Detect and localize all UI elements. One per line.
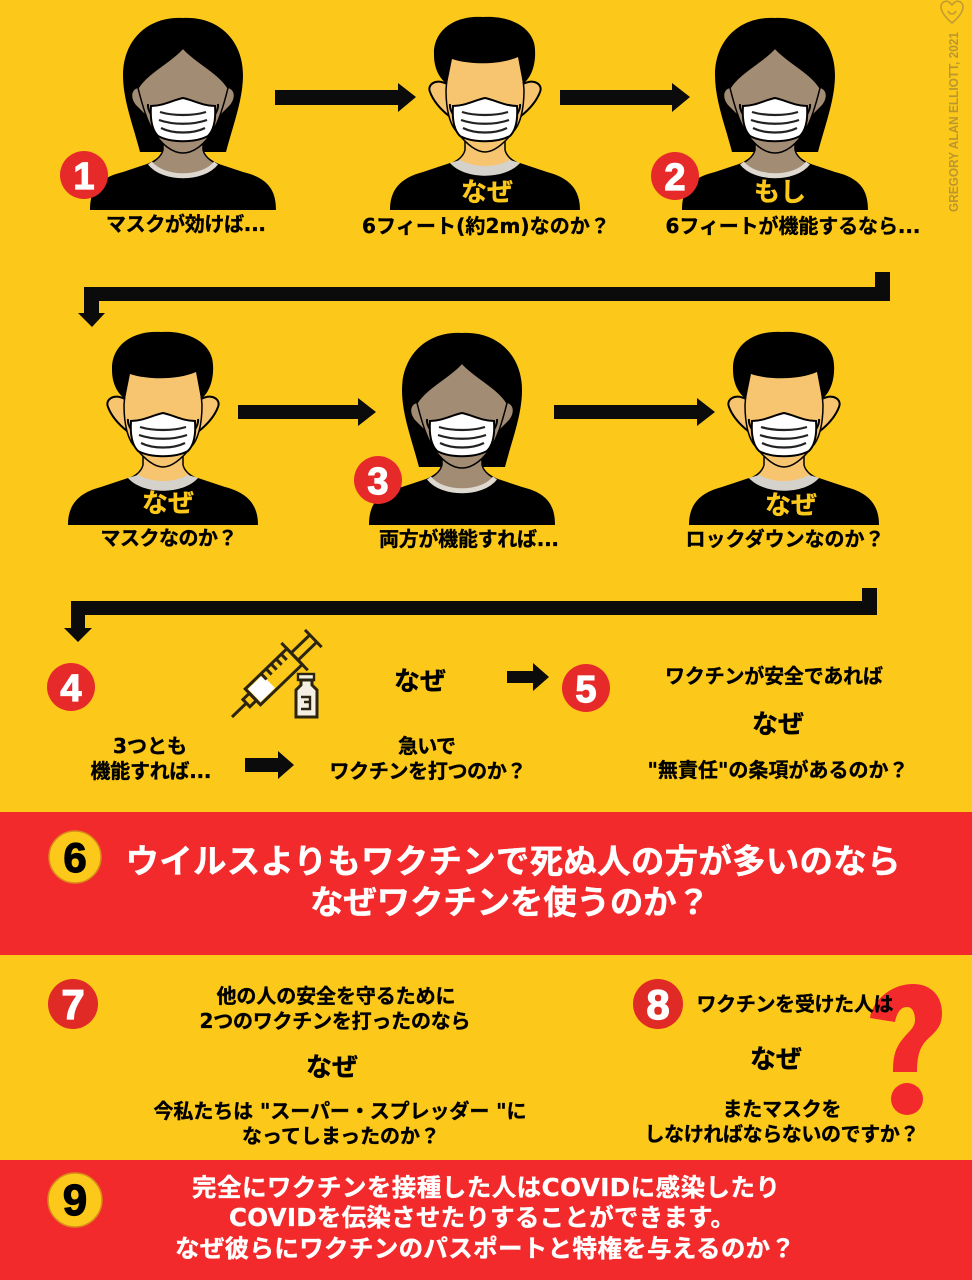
figure 2: man with why xyxy=(390,17,580,210)
why label section 7: なぜ xyxy=(306,1053,358,1083)
text: super spreader: 今私たちは "スーパー・スプレッダー "に xyxy=(154,1099,526,1123)
badge 7 xyxy=(48,979,98,1029)
caption 1: マスクが効けば... xyxy=(106,212,266,236)
badge 1 xyxy=(60,151,108,199)
text: masks again xyxy=(644,1097,920,1146)
why label: なぜ xyxy=(765,491,817,521)
badge 6 xyxy=(49,831,101,883)
text: super spreader: なってしまったのか？ xyxy=(242,1124,440,1148)
text: two vaccines xyxy=(200,984,470,1033)
caption 3: 6フィートが機能するなら... xyxy=(666,214,920,238)
figure 4: man with why xyxy=(68,332,258,525)
banner 6 heading xyxy=(126,842,900,922)
text: masks again: またマスクを xyxy=(722,1097,842,1121)
text: no liability: "無責任"の条項があるのか？ xyxy=(648,758,908,782)
banner 9 text: なぜ彼らにワクチンのパスポートと特権を与えるのか？ xyxy=(175,1234,795,1263)
panel: red banner 9 xyxy=(0,1160,972,1280)
connector arrow 1 xyxy=(78,272,890,327)
badge 9: 9 xyxy=(63,1176,87,1225)
text: if all three work: 3つとも xyxy=(113,734,187,758)
text: if all three work xyxy=(90,734,212,783)
text: two vaccines: 2つのワクチンを打ったのなら xyxy=(200,1009,470,1033)
why label section 4: なぜ xyxy=(394,667,446,697)
badge 8: 8 xyxy=(646,981,670,1028)
text: rush vaccine: ワクチンを打つのか？ xyxy=(330,759,526,783)
banner 6 heading: なぜワクチンを使うのか？ xyxy=(310,883,710,922)
text: rush vaccine: 急いで xyxy=(398,734,456,758)
badge 9 xyxy=(48,1173,102,1227)
badge 2 xyxy=(651,152,699,200)
figure 1: woman with badge 1 xyxy=(60,18,276,210)
badge 8 xyxy=(633,979,683,1029)
figure 6: man with why xyxy=(689,332,879,525)
connector arrow 2 xyxy=(64,588,877,642)
why label: なぜ xyxy=(142,489,194,519)
figure 3: woman with badge 2 xyxy=(651,18,868,210)
if label: もし xyxy=(754,178,806,208)
badge 3: 3 xyxy=(367,461,389,503)
badge 4 xyxy=(47,663,95,711)
caption 5: 両方が機能すれば... xyxy=(379,527,559,551)
badge 2: 2 xyxy=(664,157,686,199)
caption 6: ロックダウンなのか？ xyxy=(686,527,884,551)
credit: artist signature: GREGORY ALAN ELLIOTT, 2021 xyxy=(946,32,961,212)
badge 5: 5 xyxy=(575,669,597,711)
arrow 6 xyxy=(245,751,294,779)
badge 3 xyxy=(354,456,402,504)
why label: なぜ xyxy=(461,178,513,208)
banner 9 text: 完全にワクチンを接種した人はCOVIDに感染したり xyxy=(192,1173,780,1202)
badge 1: 1 xyxy=(73,156,95,198)
banner 9 text xyxy=(175,1173,795,1263)
icon: red question mark xyxy=(870,984,942,1115)
badge 6: 6 xyxy=(63,834,87,881)
badge 5 xyxy=(562,664,610,712)
text: rush vaccine xyxy=(330,734,526,783)
icon: syringe xyxy=(219,625,326,731)
text: vaccinated people: ワクチンを受けた人は xyxy=(696,992,894,1016)
text: vaccine safe: ワクチンが安全であれば xyxy=(665,664,883,688)
credit: artist signature xyxy=(941,1,963,212)
figure 5: woman with badge 3 xyxy=(354,333,555,525)
why label section 8: なぜ xyxy=(750,1045,802,1075)
banner 9 text: COVIDを伝染させたりすることができます。 xyxy=(229,1203,735,1232)
arrow 1 xyxy=(275,83,416,112)
arrow 3 xyxy=(238,398,376,426)
arrow 4 xyxy=(554,398,715,426)
arrow 2 xyxy=(560,83,690,112)
text: if all three work: 機能すれば... xyxy=(90,759,212,783)
text: super spreader xyxy=(154,1099,526,1148)
panel: red banner 6 xyxy=(0,812,972,955)
banner 6 heading: ウイルスよりもワクチンで死ぬ人の方が多いのなら xyxy=(126,842,900,881)
icon: vial xyxy=(296,674,317,717)
caption 4: マスクなのか？ xyxy=(100,526,238,550)
text: two vaccines: 他の人の安全を守るために xyxy=(216,984,456,1008)
badge 7: 7 xyxy=(61,981,85,1028)
caption 2: 6フィート(約2m)なのか？ xyxy=(362,214,610,238)
why label section 5: なぜ xyxy=(752,710,804,740)
text: masks again: しなければならないのですか？ xyxy=(644,1122,920,1146)
badge 4: 4 xyxy=(60,668,82,710)
arrow 5 xyxy=(507,663,549,691)
